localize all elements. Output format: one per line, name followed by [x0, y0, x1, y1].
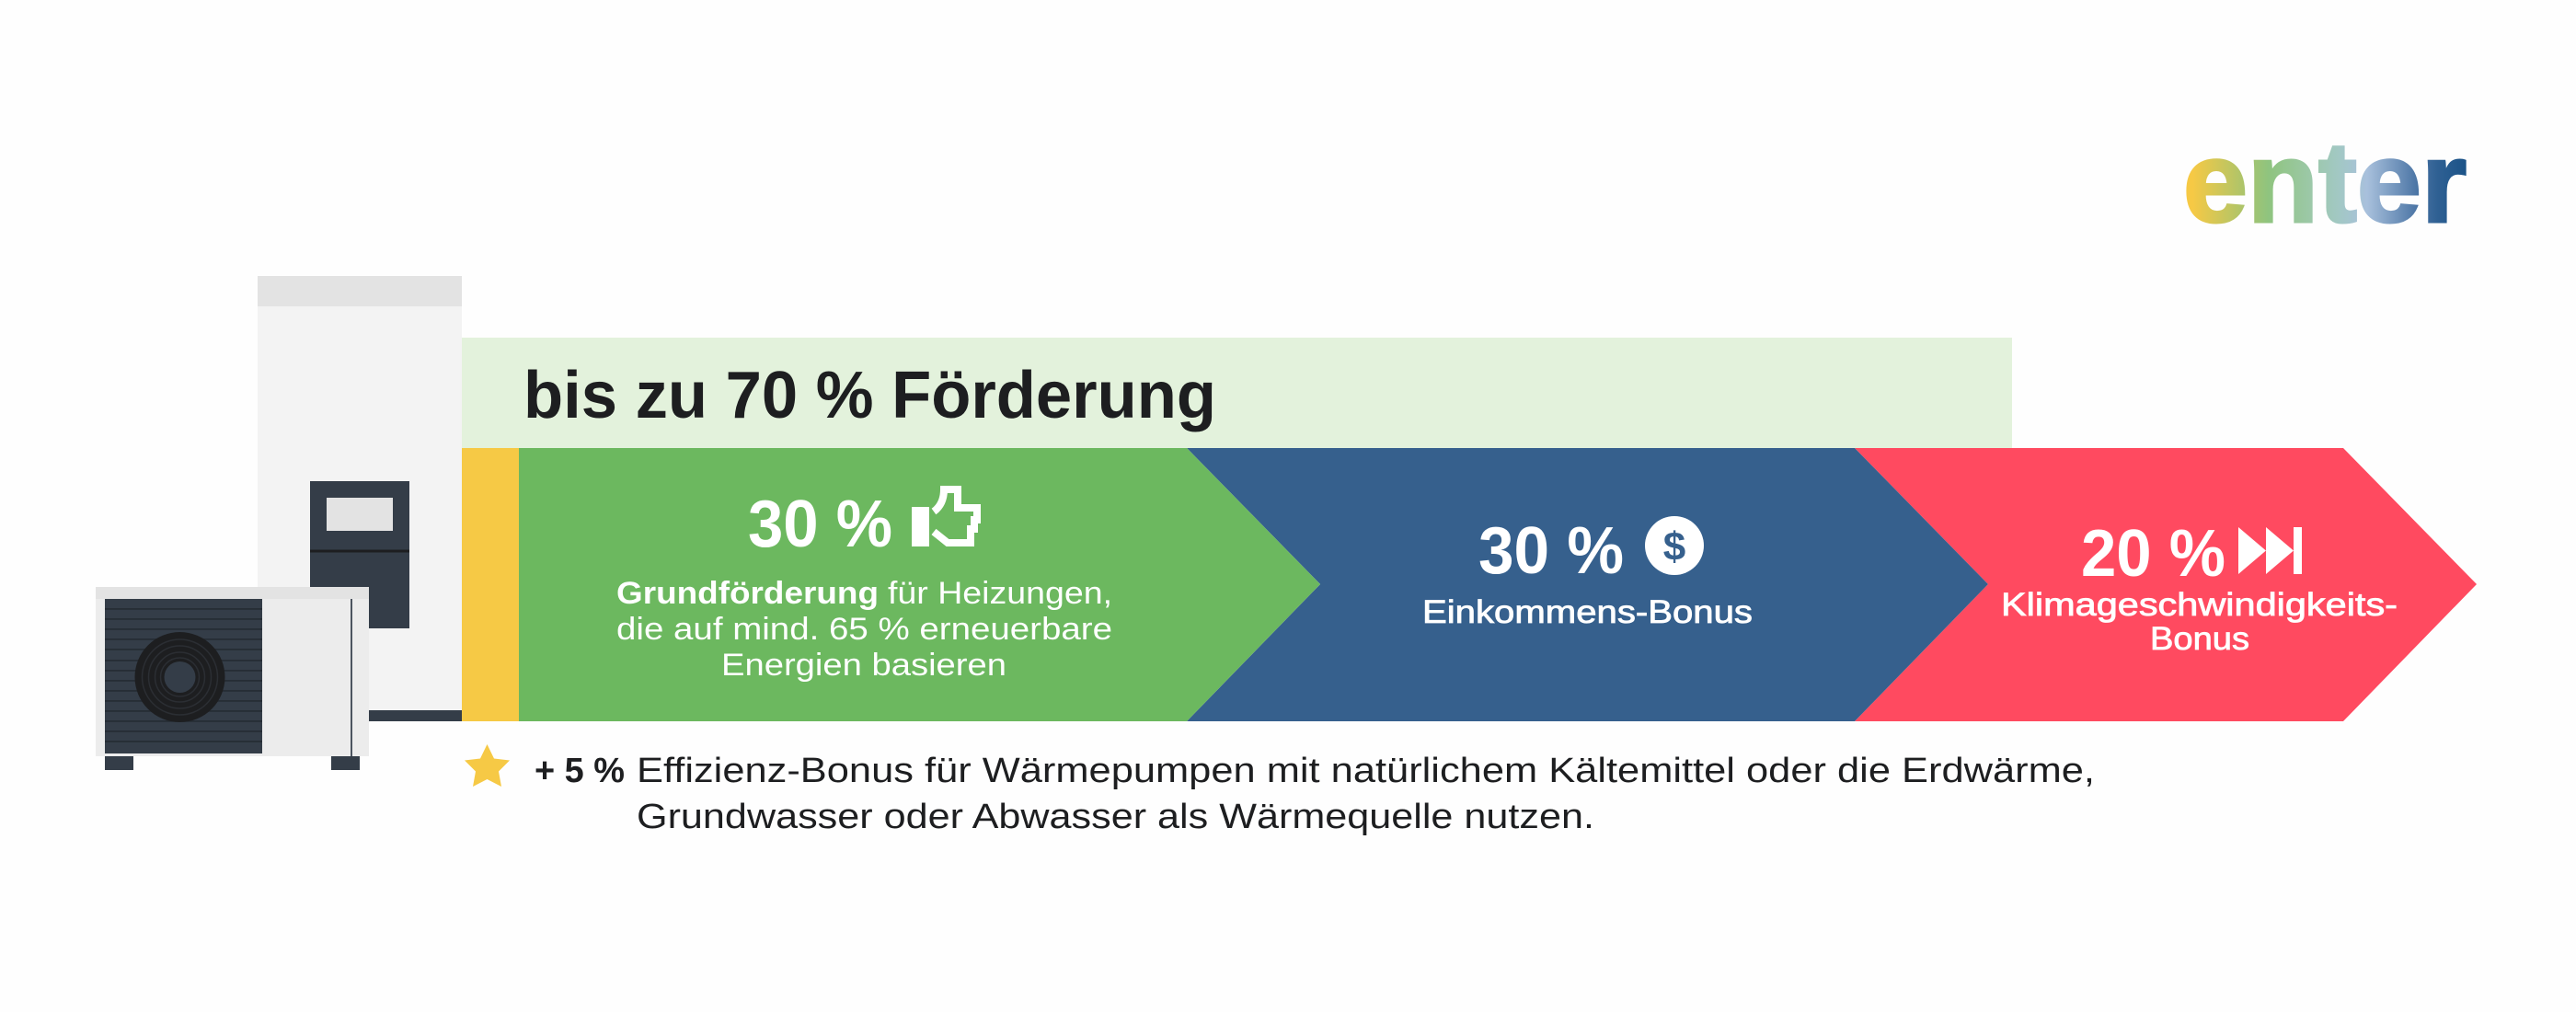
arrow: Grundförderung — [519, 448, 1320, 721]
illustration: heat pump — [96, 276, 462, 770]
description: die auf mind. 65 % erneuerbare — [616, 612, 1112, 647]
description: Grundförderung — [616, 576, 879, 611]
label: Einkommens-Bonus — [1422, 594, 1753, 630]
percentage: 30 %: 30 % — [1478, 514, 1624, 588]
arrow: Klimageschwindigkeits-Bonus — [1855, 448, 2477, 721]
panel text: Klimageschwindigkeits-Bonus — [2001, 517, 2398, 657]
percentage: 20 %: 20 % — [2081, 517, 2225, 591]
icon: dollar coin — [1645, 516, 1704, 575]
label: Bonus — [2150, 621, 2249, 657]
description: für Heizungen, — [888, 576, 1112, 611]
description — [616, 576, 1112, 683]
footnote: efficiency bonus — [535, 752, 2095, 836]
icon: fast forward — [2238, 527, 2302, 574]
label: Klimageschwindigkeits- — [2001, 587, 2398, 623]
icon: thumbs up — [912, 489, 977, 546]
percentage: 30 %: 30 % — [748, 488, 892, 561]
arrow: Einkommens-Bonus — [1187, 448, 1988, 721]
panel text: Einkommens-Bonus — [1422, 514, 1753, 630]
indoor tower unit — [258, 276, 462, 721]
footnote: efficiency bonus: + 5 % — [535, 752, 625, 790]
description: Energien basieren — [721, 648, 1006, 683]
footnote: efficiency bonus: Effizienz-Bonus für Wärmepumpen mit natürlichem Kältemittel oder die Erdwärme, — [637, 752, 2095, 790]
logo: enter: enter — [2183, 120, 2467, 247]
panel text: Grundförderung — [616, 488, 1112, 683]
panel: light green title band — [462, 338, 2012, 448]
label — [2001, 587, 2398, 657]
icon: star — [465, 744, 510, 787]
icon: dollar coin: $ — [1663, 524, 1685, 569]
footnote: efficiency bonus: Grundwasser oder Abwasser als Wärmequelle nutzen. — [637, 798, 1594, 836]
yellow bar: efficiency bonus — [462, 448, 519, 721]
outdoor unit — [96, 587, 369, 770]
heading: bis zu 70 % Förderung — [523, 359, 1216, 432]
